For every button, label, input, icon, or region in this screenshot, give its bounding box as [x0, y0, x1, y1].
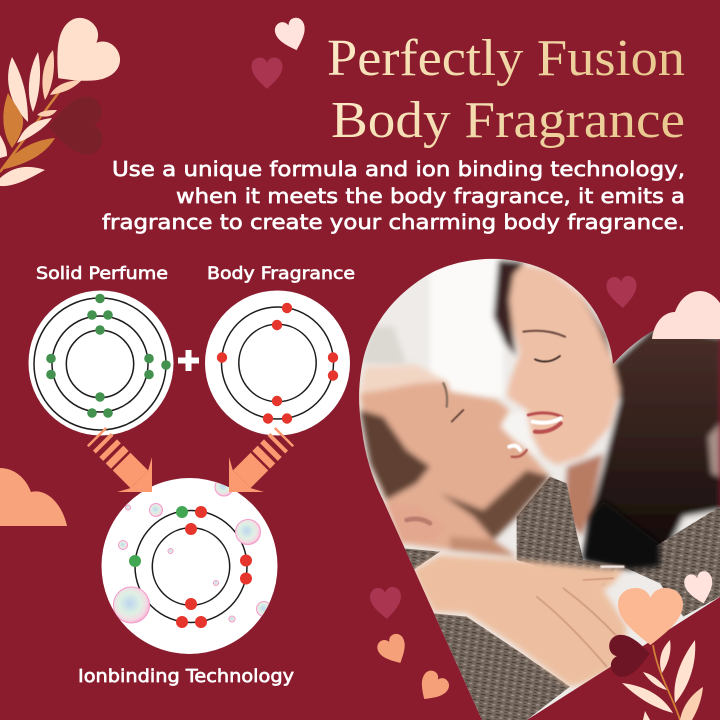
diagram: body fragrance atom — [205, 290, 350, 436]
label: Ionbinding Technology: Ionbinding Technology — [78, 667, 294, 687]
icon: small hearts top — [252, 16, 311, 89]
icon: top-left floral sprig with hearts — [0, 11, 127, 186]
label: Solid Perfume: Solid Perfume — [36, 264, 168, 283]
arrow: left, into ion binding — [79, 419, 169, 509]
heart-shaped couple photo — [350, 250, 720, 720]
label: Body Fragrance: Body Fragrance — [207, 264, 355, 283]
icon: bottom-right floral sprig with hearts — [608, 570, 717, 720]
title: Body Fragrance — [331, 92, 685, 149]
icon: mauve heart upper right — [606, 275, 638, 309]
icon: orange heart lower — [413, 668, 452, 707]
description text — [102, 157, 685, 234]
icon: mauve heart lower left — [369, 586, 402, 620]
title: Perfectly Fusion — [327, 30, 685, 87]
title — [327, 30, 685, 149]
description text: when it meets the body fragrance, it emits a — [176, 184, 685, 208]
icon: right cloud — [652, 291, 720, 339]
icon: plus sign — [178, 350, 199, 371]
description text: Use a unique formula and ion binding technology, — [112, 157, 685, 181]
diagram: ion binding circle — [102, 478, 278, 654]
description text: fragrance to create your charming body fragrance. — [102, 210, 685, 234]
diagram: solid perfume atom — [28, 290, 174, 436]
icon: left cloud — [0, 468, 67, 526]
knit sweaters — [403, 477, 720, 720]
arrow: right, into ion binding — [212, 419, 302, 509]
icon: orange heart — [375, 631, 413, 669]
